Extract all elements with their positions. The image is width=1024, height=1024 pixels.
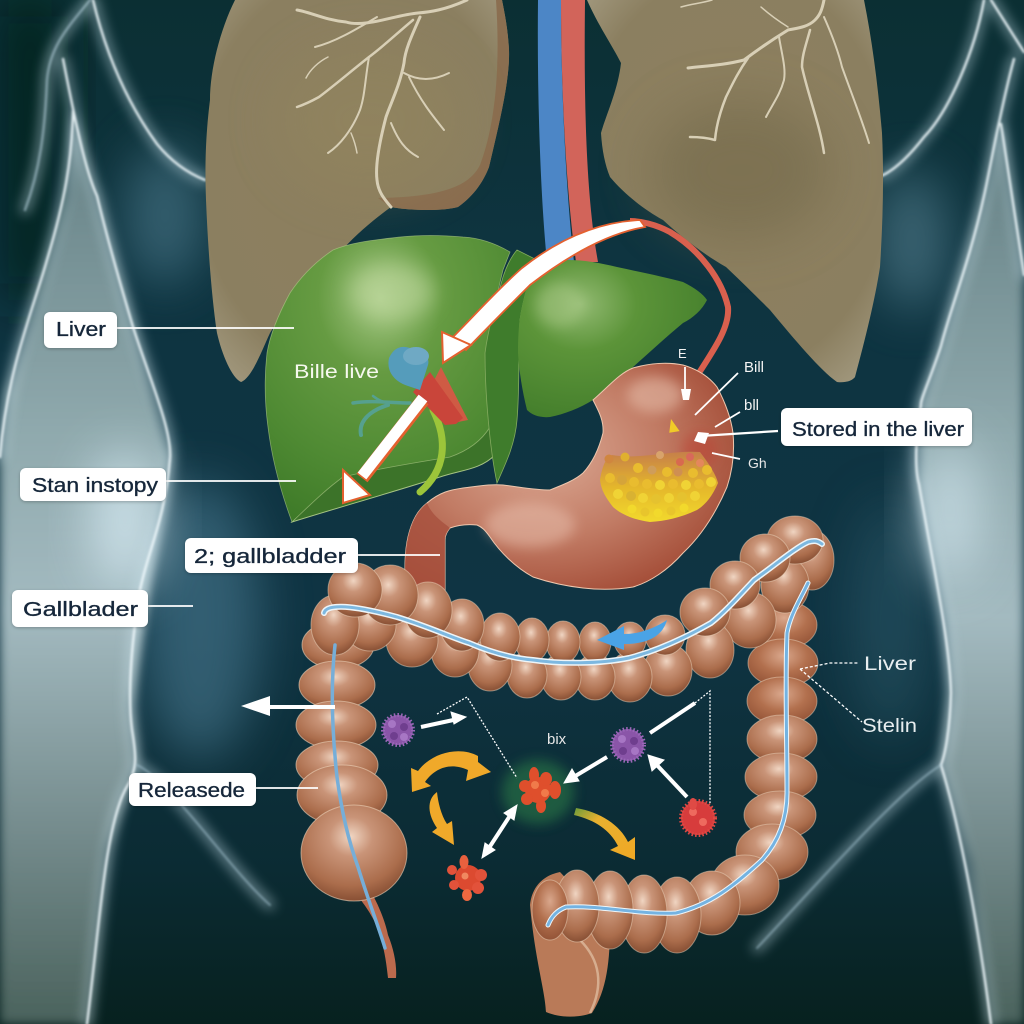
label: Releasede xyxy=(129,773,256,806)
label: Liver xyxy=(44,312,117,348)
text: Bill: Bill xyxy=(744,359,764,376)
transverse colon upper row xyxy=(328,516,823,663)
bile arrows over liver xyxy=(343,220,728,503)
orange arrows xyxy=(411,751,635,860)
annotation: Liver: Liver xyxy=(864,654,917,675)
label: Stan instopy xyxy=(20,468,166,501)
label: Stored in the liver xyxy=(781,408,972,446)
pathway arrows xyxy=(241,691,710,860)
central red cell xyxy=(502,760,574,824)
label: Stored in the liver: Stored in the liver xyxy=(792,419,964,441)
purple cell right xyxy=(612,729,644,761)
rectum xyxy=(530,872,610,1017)
label: Stan instopy: Stan instopy xyxy=(32,475,158,497)
liver ligament xyxy=(485,250,537,483)
text: Stelin: Stelin xyxy=(862,716,917,737)
label: Gallblader: Gallblader xyxy=(23,599,138,621)
dotted connectors xyxy=(437,691,710,803)
transverse colon lower row xyxy=(311,530,834,702)
liver xyxy=(265,236,707,522)
ascending colon xyxy=(296,621,407,901)
red cell bottom xyxy=(447,855,487,901)
left lung xyxy=(205,0,509,382)
gallbladder valve xyxy=(388,347,468,425)
bronchial branches right xyxy=(681,0,869,153)
red cell right xyxy=(681,798,715,835)
stomach and duodenum xyxy=(405,363,734,600)
text: bix: bix xyxy=(547,731,567,748)
blue ducts xyxy=(324,541,822,948)
cells xyxy=(383,715,715,901)
left light region xyxy=(0,111,170,1024)
text: Bille live: Bille live xyxy=(294,362,379,383)
pointer marks on stomach xyxy=(681,389,709,444)
sigmoid segments xyxy=(532,870,701,953)
right light region xyxy=(919,124,1024,1024)
bronchial branches left xyxy=(297,0,467,207)
bile duct xyxy=(353,396,442,492)
descending colon xyxy=(684,601,818,935)
text: Gh: Gh xyxy=(748,455,767,471)
liver underside xyxy=(292,425,500,522)
text: E: E xyxy=(678,346,687,361)
label: Liver: Liver xyxy=(56,319,106,341)
label: Releasede: Releasede xyxy=(138,780,245,802)
liver right lobe xyxy=(518,260,707,417)
white arrows xyxy=(421,703,695,858)
fat deposit xyxy=(600,423,718,522)
label: 2; gallbladder: 2; gallbladder xyxy=(194,546,346,568)
liver left lobe xyxy=(265,236,510,522)
label: 2; gallbladder xyxy=(185,538,358,573)
text: bll: bll xyxy=(744,397,759,414)
tail of caecum xyxy=(352,875,396,978)
blood vessels xyxy=(538,0,598,262)
annotation: Liver xyxy=(800,654,917,722)
connector lines xyxy=(116,328,778,788)
small blue arrow xyxy=(597,620,667,650)
right lung xyxy=(587,0,883,382)
arrow: out left xyxy=(241,696,335,716)
label: Gallblader xyxy=(12,590,148,627)
large intestine xyxy=(296,516,834,1017)
purple cell left xyxy=(383,715,413,745)
